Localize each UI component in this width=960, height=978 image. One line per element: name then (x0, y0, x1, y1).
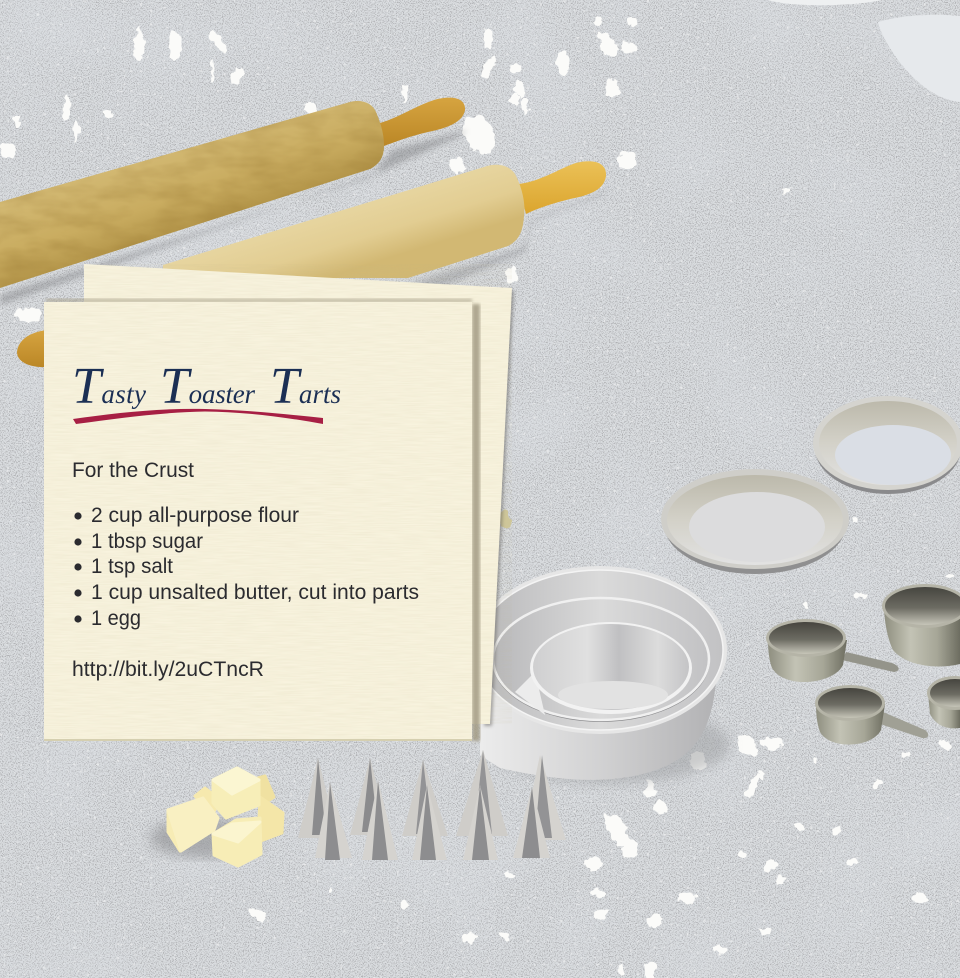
section heading: For the Crust: For the Crust (72, 459, 194, 482)
ingredient list: 1 egg (91, 607, 141, 630)
ingredient list: 1 tsp salt (91, 555, 173, 578)
source link: http://bit.ly/2uCTncR (72, 658, 264, 681)
measuring cup: large (882, 584, 960, 666)
piping tips (298, 750, 566, 860)
ingredient list: 1 tbsp sugar (91, 530, 203, 553)
pie plate: left (661, 469, 849, 574)
title: Tasty Toaster Tarts (72, 358, 341, 415)
rolling pin: upper (0, 98, 468, 305)
measuring cup: small with handle (815, 685, 928, 745)
measuring cup: right edge (927, 676, 960, 728)
back recipe card (84, 264, 514, 726)
top-right white dishes (768, 0, 960, 102)
title: Tasty Toaster Tarts: Toaster (160, 358, 255, 415)
measuring cup: medium with handle (766, 619, 899, 682)
title: Tasty Toaster Tarts: Tasty (72, 358, 146, 415)
pie plate: right (813, 396, 960, 494)
title underline brush stroke (73, 409, 323, 424)
rolling pin: lower (17, 161, 610, 367)
title: Tasty Toaster Tarts: Tarts (270, 358, 341, 415)
front recipe card (44, 298, 480, 741)
butter cubes (150, 768, 283, 866)
ingredient list: 2 cup all-purpose flour (91, 504, 299, 527)
ingredient list (74, 504, 419, 630)
stacked round cake pans (473, 566, 730, 783)
ingredient list: 1 cup unsalted butter, cut into parts (91, 581, 419, 604)
